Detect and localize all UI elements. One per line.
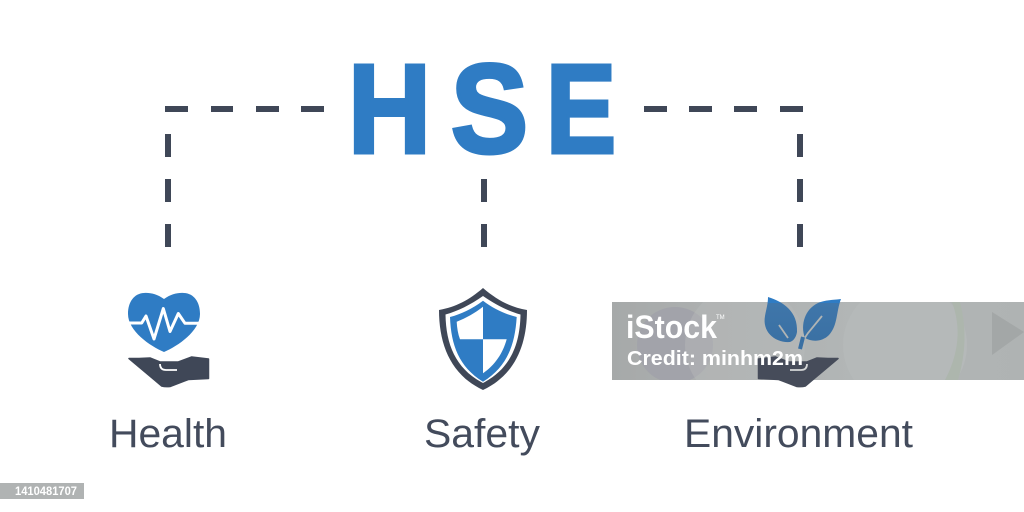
watermark text: trademark: TM: [716, 315, 725, 321]
watermark text: iStock: iStock: [626, 309, 717, 345]
dashed connector: right: [644, 106, 803, 247]
dashed connector: centre: [481, 179, 487, 247]
image id tag: [0, 483, 84, 499]
title: HSE: H: [348, 38, 431, 180]
title: HSE: [348, 38, 616, 180]
label: Environment: Environment: [684, 412, 913, 456]
icon: shield: [439, 288, 527, 390]
dashed connector: left: [165, 106, 324, 247]
title: HSE: S: [451, 38, 528, 180]
watermark band: [612, 302, 1024, 380]
icon: heart on hand: [127, 293, 208, 387]
image id tag: 1410481707: [15, 486, 77, 498]
watermark text: credit: Credit: minhm2m: [627, 348, 803, 370]
label: Health: Health: [109, 412, 227, 456]
title: HSE: E: [546, 38, 616, 180]
label: Safety: Safety: [424, 412, 540, 456]
icon: plant on hand: [758, 297, 841, 387]
